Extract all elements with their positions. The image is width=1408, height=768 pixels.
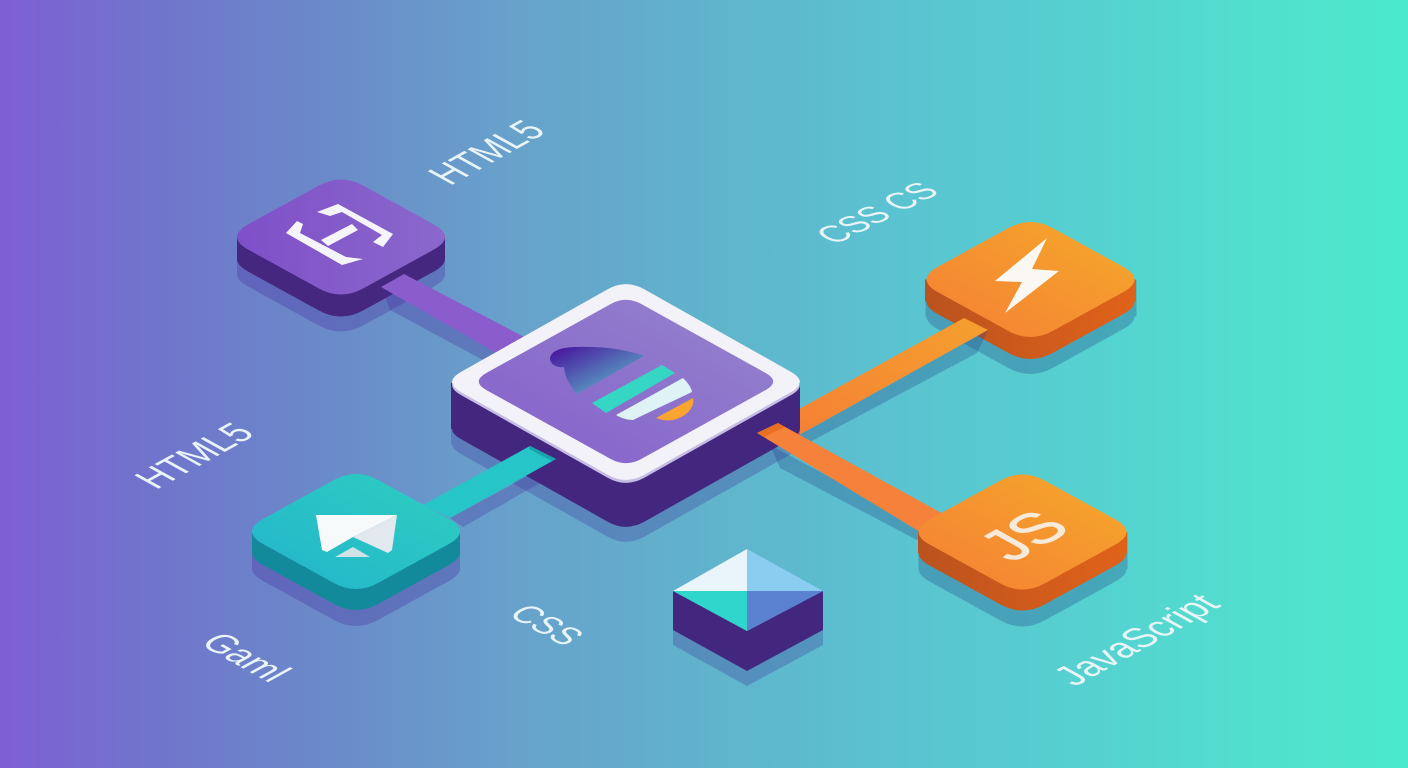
connector: orange upper link [790,318,988,440]
label: HTML5 left: HTML5 [124,417,264,494]
teal connector tip [529,446,556,461]
cube sides [673,591,823,671]
node: HTML5 purple tile [237,180,445,332]
connector: orange lower link [757,423,945,535]
tile shadow [237,216,445,332]
tile side [925,244,1136,359]
connector shadow: orange upper [790,330,988,442]
connector: purple link [381,274,530,355]
bulb white band [616,378,692,420]
label: Gaml: Gaml [192,627,301,687]
bulb dome [550,347,644,394]
label: CSS: CSS [500,600,592,651]
node: JS orange tile [918,474,1128,626]
platform inner panel [479,300,773,463]
connector: teal link [423,446,556,518]
icon: paper plane [316,515,397,557]
node: CSS orange lightning tile [925,222,1136,374]
connector shadow: teal [450,472,540,527]
label: CSS CS: CSS CS [807,177,948,249]
central platform [451,284,800,542]
orange connector tip [757,423,785,437]
tile shadow [252,511,460,626]
tile shadow [918,512,1128,626]
tile top face [237,180,445,294]
icon: JS letters: JS [963,502,1086,570]
cube shadow [673,591,823,686]
tile side [252,495,460,610]
tile side [918,496,1127,610]
tile side [237,202,445,316]
label: HTML5 top: HTML5 [418,114,555,190]
cube top: front left [673,591,747,631]
cube top: front right [747,591,823,631]
platform shadow [451,346,800,542]
cube top: back right [747,549,823,591]
platform lip [452,287,800,483]
tile shadow [926,259,1136,374]
bulb orange base [656,398,693,420]
icon: code brackets [286,204,393,265]
icon: striped bulb [550,347,693,420]
tile top face [926,222,1134,337]
label: JavaScript: JavaScript [1043,588,1231,692]
platform side [451,331,800,527]
small cube [673,549,823,686]
tile top face [918,474,1126,590]
connector shadow: purple [381,287,500,360]
platform white frame [452,284,800,480]
connector shadow: orange lower [770,445,925,540]
bulb teal band [592,365,675,413]
tile top face [252,474,460,589]
node: teal tile [252,474,460,626]
cube top: back left [673,549,747,591]
icon: lightning bolt [995,238,1059,313]
